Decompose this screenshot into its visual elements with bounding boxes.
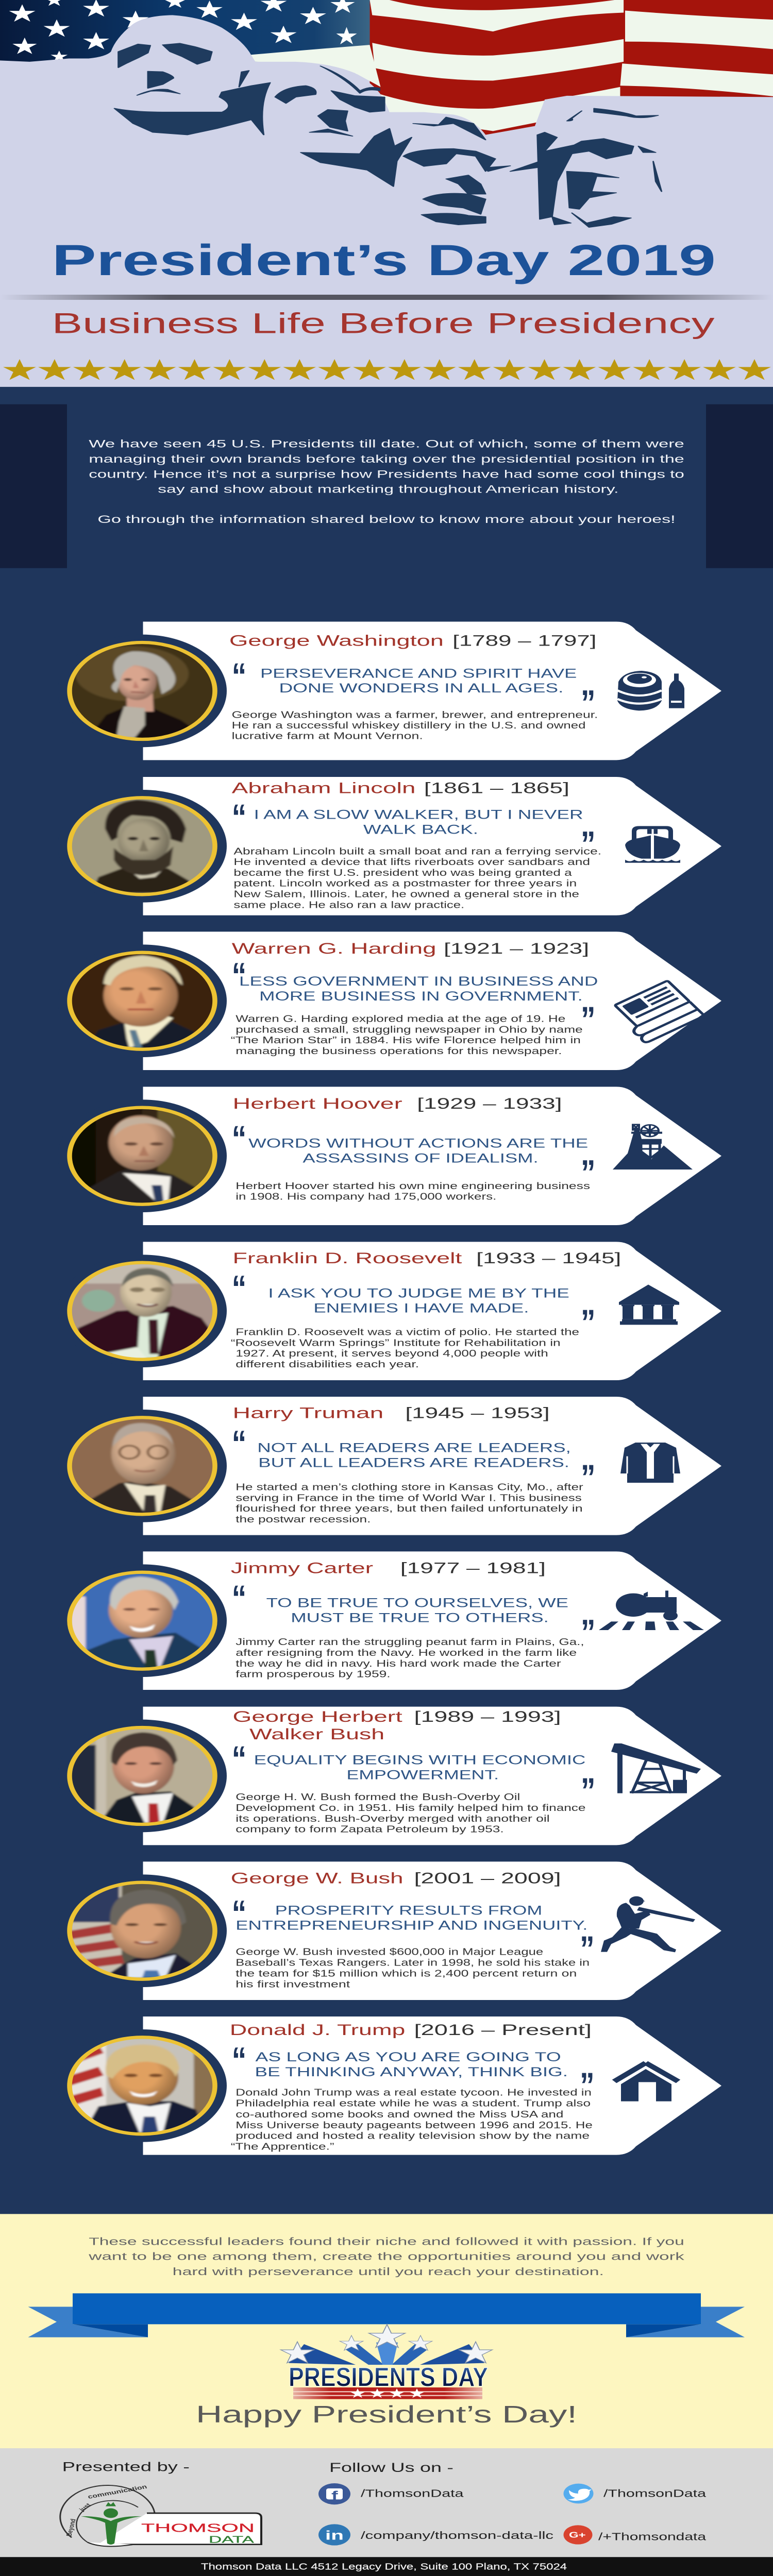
twitter handle: /ThomsonData (603, 2488, 707, 2499)
Thomson Data logo: DATA (209, 2534, 254, 2545)
text: George Herbert Walker Bush: ” (581, 1771, 596, 1811)
text: Donald J. Trump: AS LONG AS YOU ARE GOING TO (256, 2049, 561, 2064)
icon: oil pump (611, 1743, 701, 1793)
text: Donald J. Trump: co-authored some books and owned the Miss USA and (236, 2109, 563, 2120)
text: Franklin D. Roosevelt (231, 1249, 621, 1369)
icon: mine (613, 1125, 693, 1170)
title: President’s Day 2019 (52, 235, 716, 284)
text: George W. Bush (231, 1869, 595, 1989)
icon: facebook (318, 2483, 350, 2504)
shadow divider (0, 295, 773, 300)
icon: baseball batter (601, 1896, 695, 1952)
card: Donald J. Trump (58, 2016, 721, 2155)
text: Franklin D. Roosevelt: I ASK YOU TO JUDGE ME BY THE (268, 1286, 569, 1300)
text: Herbert Hoover: in 1908. His company had 175,000 workers. (236, 1191, 496, 1202)
linkedin handle: /company/thomson-data-llc (361, 2530, 553, 2541)
text: Abraham Lincoln: “ (232, 798, 246, 837)
closing text: want to be one among them, create the opportunities around you and work (88, 2251, 684, 2263)
text: Warren G. Harding: [1921 – 1923] (444, 939, 589, 957)
text: Jimmy Carter: TO BE TRUE TO OURSELVES, WE (266, 1596, 568, 1610)
text: Donald J. Trump: ” (580, 2065, 595, 2106)
text: Jimmy Carter: MUST BE TRUE TO OTHERS. (291, 1611, 549, 1625)
text: Donald J. Trump: [2016 – Present] (414, 2021, 592, 2038)
card: George Herbert Walker Bush (58, 1707, 721, 1845)
icon: twitter (564, 2484, 594, 2503)
blue ribbon (28, 2293, 745, 2337)
row of gold stars (3, 359, 771, 380)
icon: jacket (620, 1443, 680, 1483)
text: Abraham Lincoln: same place. He also ran a law practice. (233, 899, 464, 910)
text: Harry Truman: He started a men’s clothing store in Kansas City, Mo., after (236, 1482, 583, 1493)
portrait: George W. Bush (70, 1883, 214, 1979)
text: George Washington: He ran a successful whiskey distillery in the U.S. and owned (232, 720, 585, 731)
portrait ring (70, 1108, 215, 1205)
text: Franklin D. Roosevelt: Franklin D. Roosevelt (233, 1249, 462, 1266)
text: Jimmy Carter: [1977 – 1981] (400, 1559, 546, 1577)
text: George Herbert Walker Bush: George H. W. Bush formed the Bush-Overby Oil (236, 1791, 520, 1802)
text: Warren G. Harding: ” (581, 999, 596, 1040)
card: George Washington (58, 622, 721, 760)
text: Jimmy Carter: Jimmy Carter ran the struggling peanut farm in Plains, Ga., (236, 1636, 584, 1647)
portrait: Herbert Hoover (70, 1108, 214, 1204)
text: George Herbert Walker Bush: George Herbert (233, 1708, 402, 1725)
text: Jimmy Carter: the way he did in navy. His hard work made the Carter (236, 1658, 561, 1669)
text: Harry Truman: BUT ALL LEADERS ARE READERS. (258, 1455, 569, 1470)
text: Abraham Lincoln: Abraham Lincoln (232, 779, 415, 796)
text: Donald J. Trump: produced and hosted a reality television show by the name (236, 2130, 590, 2141)
text: Franklin D. Roosevelt: “Roosevelt Warm Springs” Institute for Rehabilitation in (231, 1337, 561, 1348)
text: Herbert Hoover: Herbert Hoover started his own mine engineering business (236, 1180, 590, 1191)
google plus handle: /+Thomsondata (598, 2531, 707, 2543)
icon: bank (619, 1284, 679, 1325)
portrait: Franklin D. Roosevelt (70, 1263, 214, 1359)
portrait ring (70, 1572, 215, 1669)
text: George Washington: [1789 – 1797] (452, 632, 597, 649)
text: Donald J. Trump (230, 2021, 595, 2151)
text: George Herbert Walker Bush: Development Co. in 1951. His family helped him to finance (236, 1802, 585, 1813)
portrait ring (70, 1883, 215, 1979)
icon: facebook: f (331, 2488, 338, 2503)
card: Warren G. Harding (58, 931, 721, 1070)
portrait ring (70, 642, 215, 739)
text: George W. Bush: [2001 – 2009] (414, 1869, 561, 1887)
text: Harry Truman: [1945 – 1953] (405, 1404, 550, 1421)
text: George Herbert Walker Bush: Walker Bush (249, 1725, 384, 1742)
portrait: George H. W. Bush (70, 1728, 214, 1824)
text: Harry Truman: NOT ALL READERS ARE LEADERS, (257, 1440, 571, 1455)
text: George Herbert Walker Bush: EQUALITY BEGINS WITH ECONOMIC (254, 1753, 585, 1767)
follow us heading: Follow Us on - (329, 2460, 453, 2475)
text: George Herbert Walker Bush: company to form Zapata Petroleum by 1953. (236, 1824, 504, 1835)
Thomson Data logo (60, 2484, 261, 2547)
portrait: George Washington (70, 643, 214, 739)
panel: introduction: managing their own brands before taking over the presidential position in the (89, 453, 684, 465)
text: Harry Truman: “ (232, 1423, 246, 1464)
card: Herbert Hoover (58, 1087, 721, 1225)
text: Donald J. Trump: “ (232, 2040, 246, 2080)
icon: boat (625, 826, 680, 863)
icon: google plus: G+ (569, 2531, 586, 2539)
text: Abraham Lincoln: [1861 – 1865] (424, 779, 569, 796)
text: Warren G. Harding: MORE BUSINESS IN GOVERNMENT. (259, 989, 583, 1004)
facebook handle: /ThomsonData (361, 2488, 464, 2499)
text: Herbert Hoover: “ (232, 1119, 246, 1159)
portrait ring (70, 798, 215, 894)
closing text (88, 2236, 684, 2278)
card: Franklin D. Roosevelt (58, 1242, 721, 1380)
panel: introduction: country. Hence it’s not a surprise how Presidents have had some cool things to (89, 468, 684, 480)
text: Harry Truman: Harry Truman (233, 1404, 383, 1421)
text: Jimmy Carter: Jimmy Carter (231, 1559, 373, 1577)
header panel (0, 0, 773, 387)
address bar (0, 2557, 773, 2576)
text: Abraham Lincoln: ” (581, 824, 596, 864)
Presidents Day emblem (281, 2325, 492, 2399)
text: Warren G. Harding: purchased a small, struggling newspaper in Ohio by name (236, 1024, 583, 1035)
page background (0, 387, 773, 2214)
panel: footer credits (0, 2448, 773, 2557)
text: Abraham Lincoln: New Salem, Illinois. Later, he owned a general store in the (233, 889, 579, 900)
panel: introduction: Go through the information shared below to know more about your heroes! (97, 513, 676, 526)
text: Franklin D. Roosevelt: 1927. At present, it serves beyond 4,000 people with (236, 1348, 548, 1359)
card: Jimmy Carter (58, 1551, 721, 1690)
icon: google plus (564, 2525, 593, 2545)
portrait: Jimmy Carter (70, 1572, 214, 1669)
text: Franklin D. Roosevelt: “ (232, 1268, 246, 1309)
subtitle: Business Life Before Presidency (52, 307, 715, 340)
portrait ring (70, 1727, 215, 1824)
text: George W. Bush: Baseball’s Texas Rangers. Later in 1998, he sold his stake in (236, 1957, 590, 1968)
text: Donald J. Trump: Donald J. Trump (230, 2021, 405, 2038)
panel: closing message (0, 2214, 773, 2448)
text: George W. Bush: his first investment (236, 1978, 350, 1989)
panel: introduction: say and show about marketing throughout American history. (158, 483, 619, 496)
text: Abraham Lincoln: Abraham Lincoln built a small boat and ran a ferrying service. (233, 845, 601, 856)
text: Jimmy Carter (231, 1559, 596, 1680)
text: Harry Truman: ” (581, 1458, 596, 1498)
text: George Herbert Walker Bush: EMPOWERMENT. (347, 1768, 499, 1782)
flag and Mount Rushmore illustration (0, 0, 773, 387)
text: Franklin D. Roosevelt: different disabilities each year. (236, 1359, 419, 1369)
text: Franklin D. Roosevelt: Franklin D. Roosevelt was a victim of polio. He started the (236, 1327, 579, 1337)
text: Warren G. Harding (231, 939, 598, 1056)
text: Abraham Lincoln: patent. Lincoln worked as a postmaster for three years in (233, 878, 577, 889)
text: George W. Bush: “ (232, 1893, 246, 1934)
text: Harry Truman: flourished for three years, but then failed unfortunately in (236, 1503, 583, 1514)
text: George Washington: George Washington was a farmer, brewer, and entrepreneur. (232, 709, 598, 720)
icon: linkedin (318, 2524, 350, 2546)
text: George Herbert Walker Bush: “ (232, 1739, 246, 1779)
portrait ring (70, 953, 215, 1049)
text: George Herbert Walker Bush: [1989 – 1993] (414, 1708, 561, 1725)
panel: introduction (0, 404, 773, 568)
text: Donald J. Trump: Donald John Trump was a real estate tycoon. He invested in (236, 2087, 592, 2098)
text: Franklin D. Roosevelt: [1933 – 1945] (476, 1249, 621, 1266)
text: Harry Truman: the postwar recession. (236, 1514, 371, 1524)
text: Herbert Hoover: [1929 – 1933] (417, 1094, 562, 1112)
Thomson Data logo: just (77, 2502, 92, 2513)
text: Warren G. Harding: “The Marion Star” in 1884. His wife Florence helped him in (231, 1035, 581, 1045)
closing text: These successful leaders found their niche and followed it with passion. If you (89, 2236, 684, 2247)
text: Donald J. Trump: Philadelphia real estate while he was a student. Trump also (236, 2098, 591, 2109)
text: Abraham Lincoln: He invented a device that lifts riverboats over sandbars and (233, 856, 590, 867)
text: Jimmy Carter: farm prosperous by 1959. (236, 1669, 391, 1680)
card: Abraham Lincoln (58, 777, 721, 916)
text: George Washington: DONE WONDERS IN ALL AGES. (279, 681, 563, 696)
text: George W. Bush: ENTREPRENEURSHIP AND INGENUITY. (236, 1918, 587, 1933)
text: Warren G. Harding: Warren G. Harding explored media at the age of 19. He (236, 1013, 565, 1024)
portrait ring (70, 1263, 215, 1360)
text: George Herbert Walker Bush (232, 1708, 596, 1835)
greeting: Happy President’s Day! (196, 2401, 577, 2428)
portrait: Abraham Lincoln (70, 798, 214, 894)
address bar: Thomson Data LLC 4512 Legacy Drive, Suite 100 Plano, TX 75024 (201, 2562, 567, 2571)
card: Harry Truman (58, 1397, 721, 1535)
text: Abraham Lincoln (232, 779, 601, 910)
text: George W. Bush: ” (580, 1929, 595, 1969)
text: Herbert Hoover: ” (581, 1153, 596, 1193)
text: Herbert Hoover: ASSASSINS OF IDEALISM. (303, 1151, 539, 1165)
text: Warren G. Harding: LESS GOVERNMENT IN BUSINESS AND (239, 974, 598, 989)
icon: newspaper (609, 980, 704, 1043)
text: Jimmy Carter: ” (581, 1613, 596, 1652)
text: Abraham Lincoln: became the first U.S. president who was being granted a (233, 867, 572, 878)
Thomson Data logo: communication (87, 2484, 148, 2500)
presented by heading: Presented by - (62, 2460, 190, 2474)
text: Warren G. Harding: managing the business operations for this newspaper. (236, 1045, 562, 1056)
text: Abraham Lincoln: I AM A SLOW WALKER, BUT I NEVER (254, 807, 583, 822)
icon: keg and bottle (617, 671, 684, 710)
closing text: hard with perseverance until you reach your destination. (173, 2266, 604, 2278)
portrait ring (70, 2037, 215, 2134)
icon: tractor (599, 1590, 704, 1630)
text: Jimmy Carter: “ (232, 1579, 246, 1618)
text: George Washington: ” (581, 683, 596, 723)
text: Donald J. Trump: Miss Universe beauty pageants between 1996 and 2015. He (236, 2120, 593, 2130)
text: Harry Truman (232, 1404, 596, 1524)
Presidents Day emblem: PRESIDENTS DAY (289, 2362, 488, 2392)
Thomson Data logo: THOMSON (141, 2522, 255, 2535)
text: George Washington: “ (232, 656, 246, 696)
text: George Herbert Walker Bush: its operations. Bush-Overby merged with another oil (236, 1813, 550, 1824)
portrait ring (70, 1417, 215, 1514)
text: George W. Bush: PROSPERITY RESULTS FROM (275, 1903, 542, 1918)
text: Jimmy Carter: after resigning from the Navy. He worked in the farm like (236, 1647, 577, 1658)
text: Warren G. Harding: “ (232, 956, 246, 996)
text: George Washington: PERSEVERANCE AND SPIRIT HAVE (260, 666, 577, 681)
card: George W. Bush (58, 1861, 721, 2000)
text: Herbert Hoover: Herbert Hoover (233, 1094, 402, 1112)
text: Franklin D. Roosevelt: ” (581, 1302, 596, 1343)
text: Abraham Lincoln: WALK BACK. (363, 822, 478, 837)
icon: house (614, 2063, 678, 2102)
portrait: Donald J. Trump (70, 2038, 214, 2134)
text: Franklin D. Roosevelt: ENEMIES I HAVE MADE. (313, 1301, 529, 1315)
text: George W. Bush: George W. Bush (231, 1869, 404, 1887)
portrait: Warren G. Harding (70, 953, 214, 1049)
text: Herbert Hoover (232, 1094, 596, 1202)
portrait: Harry Truman (70, 1418, 214, 1514)
panel: introduction: We have seen 45 U.S. Presidents till date. Out of which, some of them were (89, 437, 684, 450)
text: George Washington: George Washington (229, 632, 444, 649)
text: Harry Truman: serving in France in the time of World War I. This business (236, 1492, 582, 1503)
text: George W. Bush: the team for $15 million which is 2,400 percent return on (236, 1968, 577, 1978)
text: George Washington: lucrative farm at Mount Vernon. (232, 731, 423, 741)
text: George Washington (229, 632, 598, 741)
text: Donald J. Trump: “The Apprentice.” (231, 2141, 334, 2151)
icon: linkedin: in (325, 2528, 344, 2543)
text: Herbert Hoover: WORDS WITHOUT ACTIONS ARE THE (248, 1136, 588, 1150)
text: Warren G. Harding: Warren G. Harding (232, 939, 436, 957)
Thomson Data logo: Beyond (64, 2518, 77, 2537)
text: Donald J. Trump: BE THINKING ANYWAY, THINK BIG. (255, 2064, 568, 2079)
text: George W. Bush: George W. Bush invested $600,000 in Major League (236, 1946, 543, 1957)
